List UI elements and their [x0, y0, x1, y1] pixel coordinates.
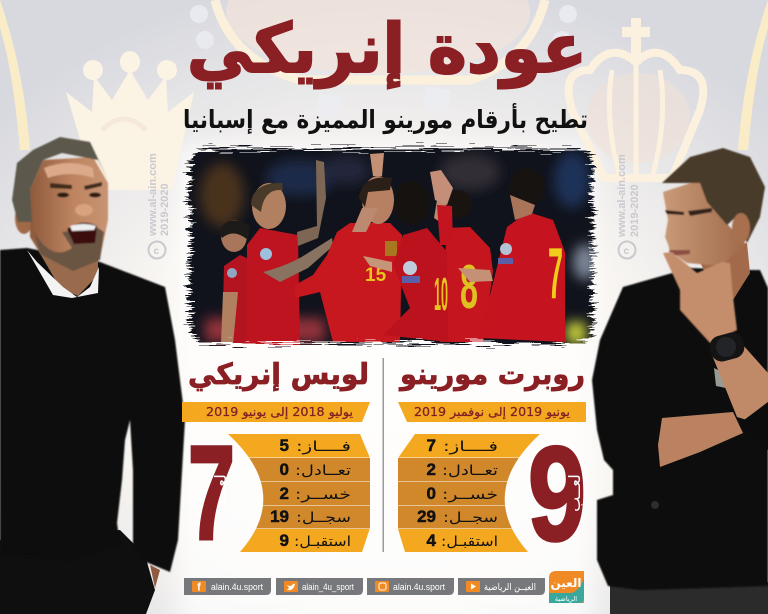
title: عودة إنريكي [187, 10, 587, 89]
hand [150, 565, 160, 588]
stats table right: استقبـل: [441, 534, 498, 550]
logo: Al Ain Sport [549, 571, 584, 603]
stats table right: فــــاز: [443, 439, 498, 455]
watermark left: www.al-ain.com [147, 153, 159, 237]
watermark right: www.al-ain.com [616, 154, 628, 238]
watermark right: c [624, 246, 630, 257]
stats table right: تعــادل: [442, 463, 498, 479]
cardigan [592, 268, 768, 590]
social: instagram [367, 578, 454, 595]
trousers [0, 530, 155, 614]
watch [707, 330, 747, 364]
button [651, 501, 659, 509]
social: youtube: العيــن الرياضية [484, 582, 536, 593]
date banner right: يونيو 2019 إلى نوفمبر 2019 [414, 405, 570, 420]
background crown left [66, 51, 194, 190]
stats table left: تعــادل: [295, 463, 351, 479]
watermark right: 2019-2020 [629, 184, 641, 237]
player Ramos: 15 [365, 265, 387, 286]
stats table left: 19 [270, 507, 289, 526]
player Inigo with raised arm [247, 160, 333, 345]
social: youtube [458, 578, 545, 595]
date banner left: يوليو 2018 إلى يونيو 2019 [206, 405, 353, 420]
stats table right: 29 [417, 507, 436, 526]
hand on chin [663, 252, 737, 343]
games played: 7: 7 [188, 419, 235, 568]
social: twitter: alain_4u_sport [302, 582, 354, 592]
trousers [610, 582, 768, 614]
stats table left: سجــل: [296, 510, 351, 526]
head [12, 137, 108, 271]
stats table right: 2 [427, 460, 436, 479]
shirt detail [714, 368, 726, 388]
watermark left [147, 153, 171, 258]
social: facebook: f [197, 582, 201, 594]
background crown right [569, 18, 703, 178]
stats table right: 0 [427, 484, 436, 503]
collar [27, 250, 99, 298]
watermark left: 2019-2020 [159, 183, 171, 236]
player number 8: 8 [460, 253, 478, 322]
date banner left [182, 402, 370, 422]
coach Luis Enrique [0, 137, 185, 614]
watermark right [616, 154, 641, 258]
photo crowd background [200, 152, 597, 344]
stats table right: سجــل: [443, 510, 498, 526]
stats table left: فــــاز: [296, 439, 351, 455]
player Ramos [295, 153, 402, 342]
neck [38, 250, 98, 296]
sweater [0, 248, 185, 572]
stats table left: 5 [280, 436, 289, 455]
player number 10 [363, 170, 453, 342]
social: facebook: alain.4u.sport [211, 582, 263, 592]
stats table right: 7 [427, 436, 436, 455]
neck [700, 243, 750, 300]
player far left [221, 220, 250, 344]
logo: Al Ain Sport: العين [550, 576, 582, 590]
sleeve [740, 402, 768, 450]
lower forearm [658, 412, 743, 467]
games played: 7 [188, 419, 235, 568]
team photo: 10 [434, 268, 448, 320]
head [662, 148, 765, 266]
social: twitter [276, 578, 363, 595]
upper forearm [712, 345, 768, 420]
stats table right: 4 [427, 531, 437, 550]
logo: Al Ain Sport: الرياضية [555, 595, 577, 603]
subtitle: تطيح بأرقام مورينو المميزة مع إسبانيا [183, 103, 588, 135]
games played: 7: لعــب [211, 474, 230, 512]
social: facebook [184, 578, 271, 595]
social: instagram: alain.4u.sport [393, 582, 445, 592]
team photo [182, 142, 599, 349]
stats table left [220, 434, 375, 552]
games played: 9: لعــب [565, 474, 584, 512]
date banner right [398, 402, 586, 422]
player number 8 [434, 190, 493, 342]
watermark left: c [154, 246, 160, 257]
name: Robert Moreno: روبرت مورينو [398, 357, 585, 391]
stats table left: 9 [280, 531, 289, 550]
stats table left: 2 [280, 484, 289, 503]
player number 7 [478, 168, 565, 342]
stats table right [395, 434, 545, 552]
games played: 9: 9 [528, 420, 586, 569]
centre divider [382, 358, 384, 552]
stats table left: 0 [280, 460, 289, 479]
team photo: 7 [548, 234, 563, 314]
name: Luis Enrique: لويس إنريكي [188, 357, 369, 392]
stats table right: خســر: [442, 487, 498, 503]
stats table left: استقبـل: [294, 534, 351, 550]
stats table left: خســر: [295, 487, 351, 503]
coach Robert Moreno [592, 148, 768, 614]
